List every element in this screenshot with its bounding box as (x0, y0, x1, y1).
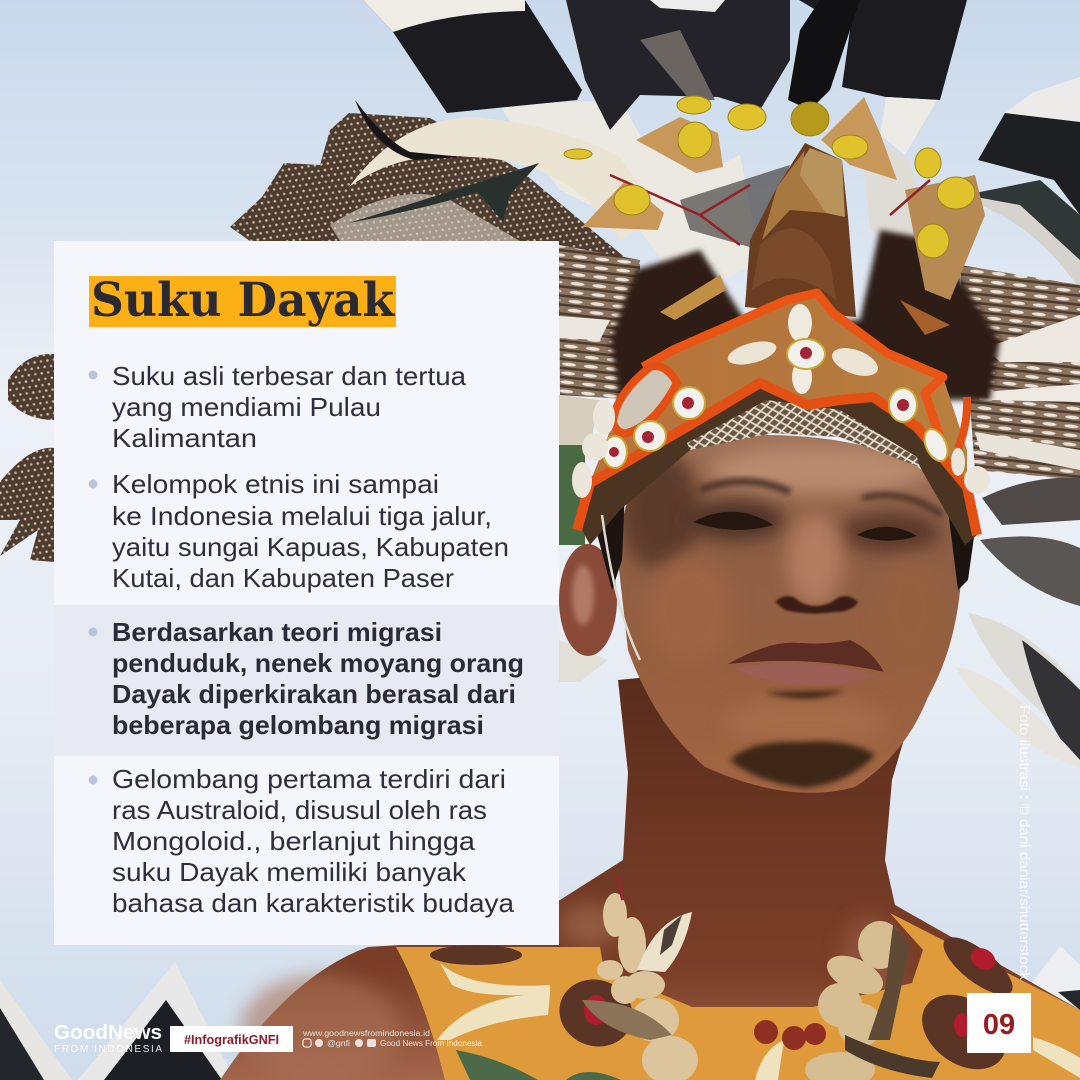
photo: black and white top feathers (363, 0, 1080, 260)
footer hashtag (170, 1026, 293, 1052)
highlighted band (54, 605, 559, 756)
photo: woven headband and orange rope crown (577, 293, 977, 545)
bullet 3, bold: Berdasarkan teori migrasi (112, 617, 442, 647)
photo: bark pieces with red strings (582, 97, 985, 300)
photo: dark hair at temples (596, 490, 975, 590)
icon: eagle head carving (745, 143, 856, 317)
page number (967, 993, 1031, 1053)
bullet 2: ke Indonesia melalui tiga jalur, (112, 501, 492, 531)
bullet 4: Mongoloid., berlanjut hingga (112, 826, 476, 856)
footer links and social icons: www.goodnewsfromindonesia.id (302, 1029, 430, 1038)
photo: left spotted feathers of headdress (230, 113, 640, 330)
bullet 1: Suku asli terbesar dan tertua (112, 361, 467, 391)
footer links and social icons: Good News From Indonesia (380, 1039, 483, 1048)
bullet 4: suku Dayak memiliki banyak (112, 857, 467, 887)
photo: face (619, 435, 960, 793)
footer logo: GoodNews from Indonesia: FROM INDONESIA (54, 1044, 162, 1055)
bullet 1: yang mendiami Pulau (112, 392, 381, 422)
title highlight (89, 276, 396, 327)
photo: right feather fan (559, 245, 1080, 768)
bullet 4: bahasa dan karakteristik budaya (112, 888, 515, 918)
footer logo: GoodNews from Indonesia: GoodNews (54, 1022, 162, 1044)
photo: neck and shoulders (220, 650, 1080, 1080)
photo: roofs in the distance (0, 946, 1080, 1080)
photo credit: Foto ilustrasi : © dani daniar/shutterstock (1017, 705, 1033, 981)
bullet 3, bold: penduduk, nenek moyang orang (112, 648, 524, 678)
panel: text card (54, 241, 559, 945)
title: Suku Dayak (91, 273, 395, 328)
icon: shells and eye discs on crown (572, 304, 990, 498)
bullet 1 (88, 361, 467, 453)
bullet 4 (88, 764, 515, 918)
photo: dark feather tufts under crest (610, 230, 1000, 400)
page number: 09 (983, 1009, 1015, 1041)
bullet 2: Kutai, dan Kabupaten Paser (112, 563, 454, 593)
bullet 4: ras Australoid, disusul oleh ras (112, 795, 487, 825)
bullet 2: Kelompok etnis ini sampai (112, 469, 439, 499)
bullet 3, bold: beberapa gelombang migrasi (112, 710, 484, 740)
mouth (728, 640, 884, 672)
bullet 2 (88, 469, 509, 593)
photo: hanging string (602, 515, 640, 660)
footer links and social icons (302, 1029, 483, 1048)
icon: gold discs (564, 96, 975, 258)
photo: white feathers behind centre (349, 100, 1080, 300)
bullet 1: Kalimantan (112, 423, 257, 453)
footer logo: GoodNews from Indonesia (54, 1022, 162, 1055)
footer hashtag: #InfografikGNFI (184, 1033, 279, 1047)
icon: tooth and bone necklace (582, 875, 940, 1080)
bullet 2: yaitu sungai Kapuas, Kabupaten (112, 532, 509, 562)
photo: left feather fragments (0, 354, 55, 562)
photo: ear (559, 544, 617, 656)
bullet 3, bold (88, 617, 524, 740)
footer links and social icons: @gnfi (327, 1039, 350, 1048)
eyes (693, 481, 942, 541)
nose (775, 596, 858, 614)
chin beard (730, 741, 875, 788)
icon: brown shell coins (430, 928, 1021, 1080)
photo: orange vest (396, 913, 1080, 1080)
bullet 3, bold: Dayak diperkirakan berasal dari (112, 679, 516, 709)
bullet 4: Gelombang pertama terdiri dari (112, 764, 506, 794)
